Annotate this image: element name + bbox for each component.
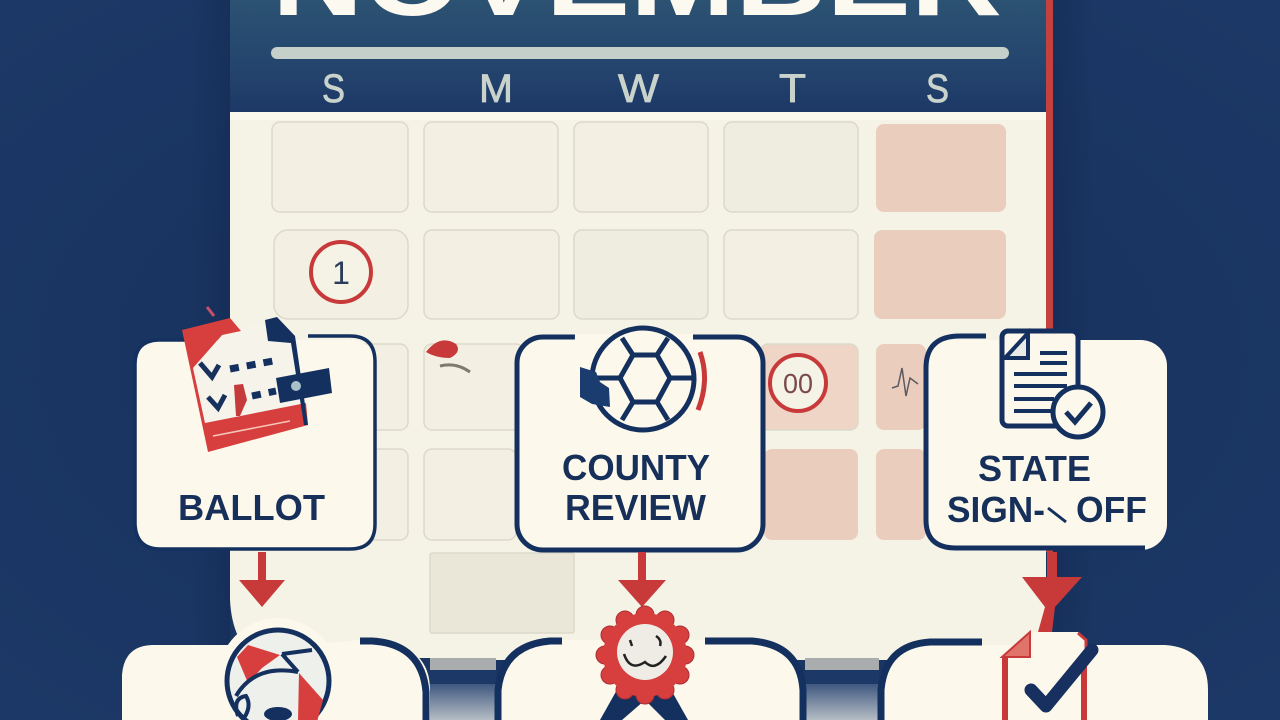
header rule [271, 47, 1009, 59]
arrow: state down [1022, 552, 1082, 632]
weekday labels: W [618, 67, 659, 111]
calendar body [230, 112, 1046, 660]
calendar date grid [272, 122, 1006, 633]
label: state sign-off: STATE [978, 448, 1091, 489]
date marker: 1 [311, 242, 371, 302]
weekday labels: S [926, 67, 949, 111]
calendar header band [230, 0, 1046, 113]
card: county review [517, 328, 763, 550]
weekday labels: M [479, 67, 513, 111]
card: lower left [122, 618, 430, 720]
icon: checked document [1002, 632, 1092, 720]
weekday labels [322, 67, 949, 111]
date marker: 1: 1 [332, 255, 350, 291]
icon: globe [218, 618, 338, 720]
card: state sign-off: SIGN- [947, 489, 1045, 530]
label: ballot: BALLOT [178, 487, 325, 528]
date marker: scribble [892, 368, 918, 396]
icon: ballot paper [182, 307, 332, 452]
card: lower middle [498, 606, 803, 720]
card: lower right [878, 632, 1208, 720]
card: ballot [135, 307, 376, 550]
card: county review: REVIEW [565, 487, 706, 528]
panel: calendar [230, 0, 1053, 660]
gap under calendar [430, 658, 879, 720]
label: county review: COUNTY [562, 447, 710, 488]
card: state sign-off [925, 331, 1167, 550]
icon: award rosette [596, 606, 694, 720]
weekday labels: T [779, 67, 806, 111]
icon: signed document [1002, 331, 1103, 437]
arrow: ballot down [239, 552, 285, 607]
weekday labels: S [322, 67, 345, 111]
arrow: county down [618, 552, 666, 607]
icon: review ball [574, 328, 710, 430]
date marker: red scribble [426, 340, 470, 372]
date marker: circled date: 00 [783, 368, 813, 399]
card: state sign-off: OFF [1076, 489, 1147, 530]
red calendar edge [1046, 0, 1053, 552]
date marker: circled date [770, 355, 826, 411]
